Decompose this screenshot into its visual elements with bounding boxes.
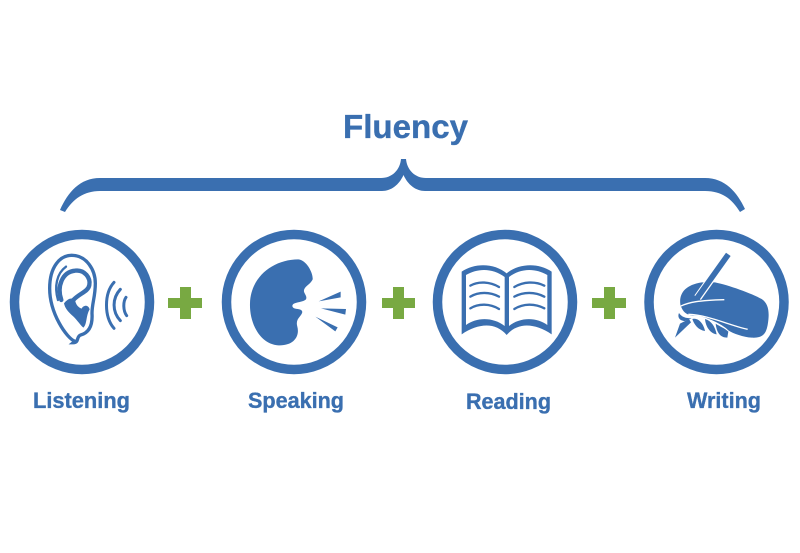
label: reading: Reading bbox=[466, 389, 551, 414]
panel: listening bbox=[14, 234, 150, 413]
label: writing: Writing bbox=[687, 388, 761, 413]
circle: speaking bbox=[226, 234, 362, 370]
panel: speaking bbox=[226, 234, 362, 413]
title: Fluency bbox=[343, 108, 469, 145]
label: listening: Listening bbox=[33, 388, 130, 413]
curly brace bbox=[60, 159, 745, 212]
panel: reading bbox=[438, 234, 572, 414]
plus 1 bbox=[168, 287, 202, 319]
label: speaking: Speaking bbox=[248, 388, 344, 413]
icon: open book bbox=[462, 265, 552, 335]
panel: writing bbox=[649, 234, 784, 413]
circle: writing bbox=[649, 234, 784, 370]
plus 2 bbox=[382, 287, 415, 319]
plus 3 bbox=[592, 287, 626, 319]
circle: reading bbox=[438, 234, 572, 370]
icon: ear with sound waves bbox=[50, 255, 127, 343]
circle: listening bbox=[14, 234, 150, 370]
icon: speaking head bbox=[250, 259, 346, 345]
icon: hand writing bbox=[675, 254, 769, 338]
